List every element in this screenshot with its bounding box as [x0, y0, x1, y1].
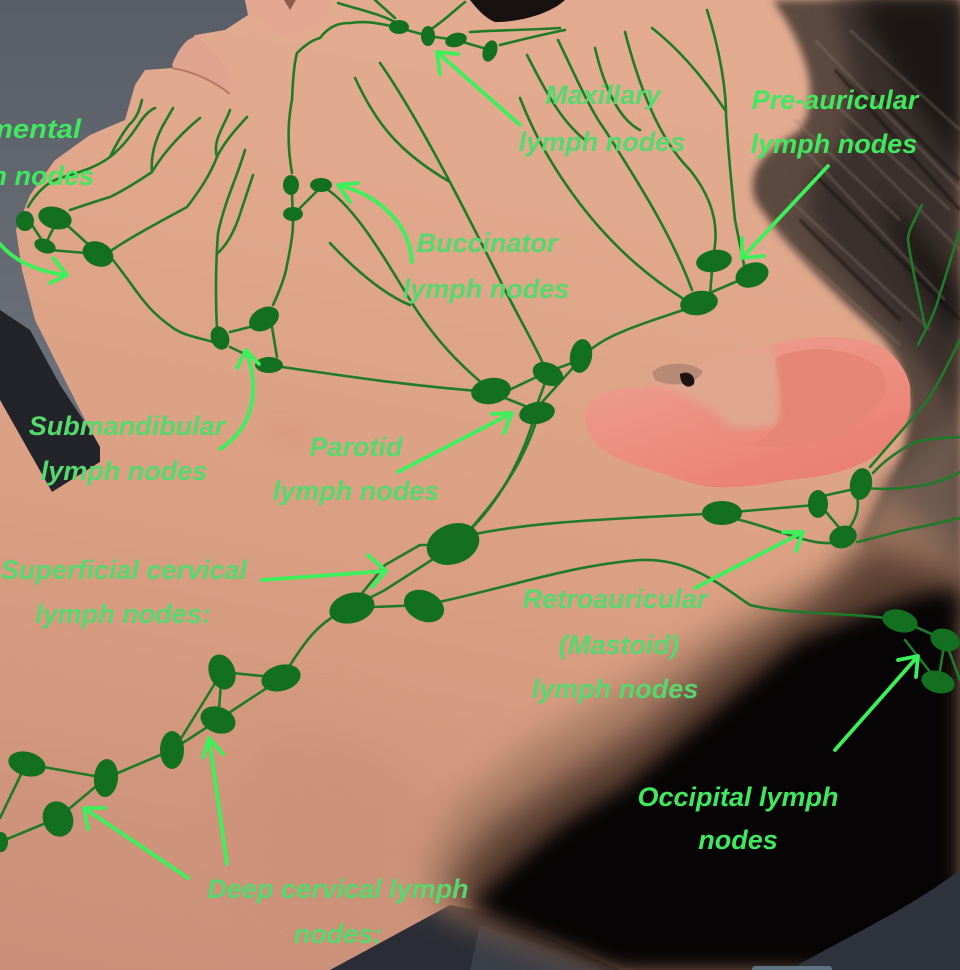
arrow: retroauricular [695, 532, 803, 588]
label: maxillary lymph nodes: Maxillary [545, 80, 663, 110]
label: deep cervical lymph nodes: nodes: [294, 919, 382, 949]
label: maxillary lymph nodes: lymph nodes [519, 127, 685, 157]
label: parotid lymph nodes: Parotid [309, 432, 403, 462]
arrow: buccinator [338, 183, 412, 262]
arrow: mental [0, 244, 67, 283]
nose and lips [172, 0, 565, 94]
label: occipital lymph nodes: Occipital lymph [637, 782, 839, 812]
label: occipital lymph nodes: nodes [698, 825, 778, 855]
arrow: deep cervical to node [84, 808, 188, 878]
ear [585, 337, 911, 487]
label: pre-auricular lymph nodes: Pre-auricular [752, 85, 920, 115]
clothing at the bottom [330, 905, 620, 970]
label: buccinator lymph nodes: Buccinator [416, 228, 559, 258]
label: submandibular lymph nodes: lymph nodes [41, 456, 207, 486]
label: pre-auricular lymph nodes: lymph nodes [751, 129, 917, 159]
label: retroauricular mastoid lymph nodes: (Mastoid) [559, 630, 679, 660]
label: mental lymph nodes [0, 114, 94, 191]
label: retroauricular mastoid lymph nodes: Retroauricular [523, 584, 709, 614]
arrow: parotid [398, 413, 512, 472]
arrow: deep cervical upper [203, 738, 227, 864]
label: superficial cervical lymph nodes: lymph nodes: [35, 599, 211, 629]
arrow: superficial cervical [262, 555, 386, 587]
arrow: maxillary [437, 52, 520, 125]
label: parotid lymph nodes: lymph nodes [273, 476, 439, 506]
label: submandibular lymph nodes: Submandibular [29, 411, 227, 441]
label: buccinator lymph nodes: lymph nodes [403, 274, 569, 304]
label: deep cervical lymph nodes: Deep cervical lymph [207, 874, 469, 904]
arrow: submandibular [220, 350, 259, 449]
label: retroauricular mastoid lymph nodes: lymph nodes [532, 674, 698, 704]
arrow: pre-auricular [742, 166, 828, 258]
label: superficial cervical lymph nodes: Superficial cervical [1, 555, 248, 585]
hair [425, 0, 960, 970]
arrow: occipital [835, 656, 918, 750]
